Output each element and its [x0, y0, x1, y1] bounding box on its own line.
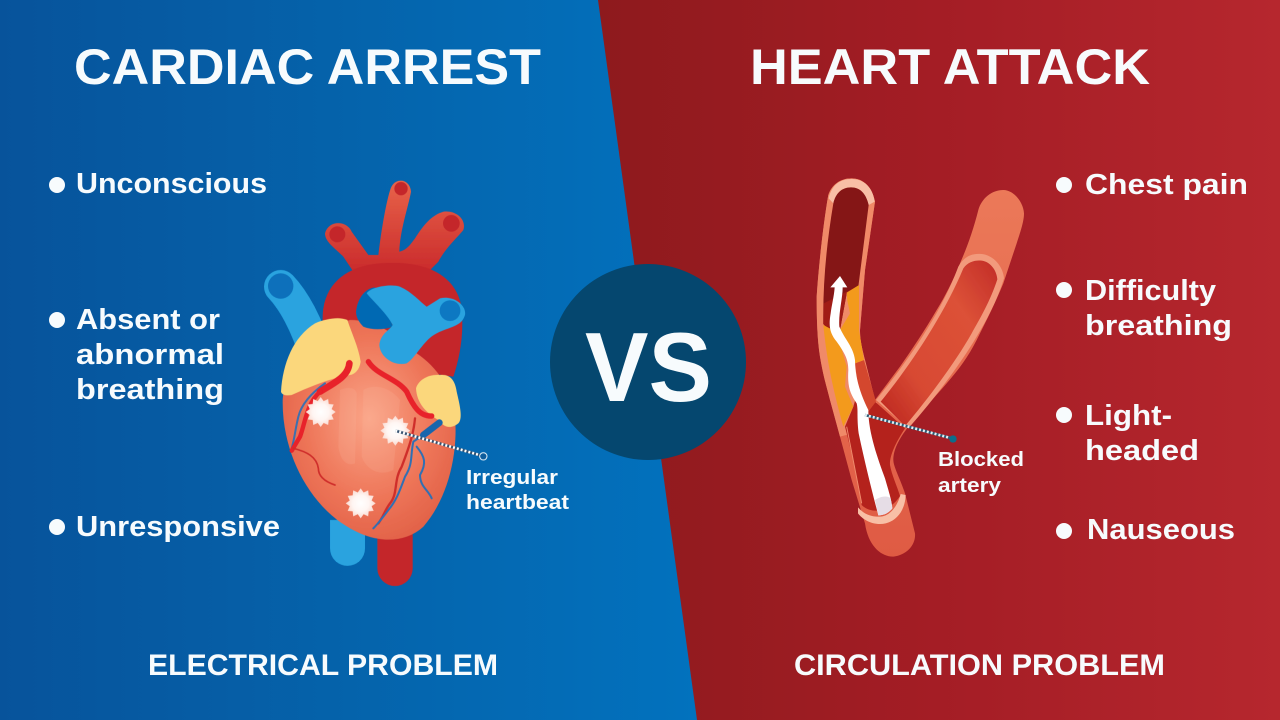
list: heart attack symptoms [1056, 169, 1248, 546]
illustration: artery [817, 178, 1024, 557]
yellow atrium right [416, 375, 461, 427]
bullet: absent or abnormal breathing: breathing [76, 374, 224, 406]
bullet: absent or abnormal breathing: abnormal [76, 339, 224, 371]
left lumen dark [823, 187, 869, 333]
caption: electrical problem: ELECTRICAL PROBLEM [148, 649, 498, 682]
panel: heart attack background [598, 0, 1280, 720]
list: cardiac arrest symptoms [49, 168, 280, 543]
flow shade [875, 497, 892, 515]
plaque right [840, 285, 864, 363]
right lumen rim [876, 254, 1004, 428]
illustration: heart [268, 181, 487, 586]
lower lumen inner wall [847, 427, 862, 503]
aortic arch [323, 263, 462, 377]
vs badge: VS [585, 312, 712, 422]
lower lumen [845, 370, 905, 511]
panel: cardiac arrest background [0, 0, 700, 720]
wedge beside flow [855, 360, 876, 412]
right lumen [881, 261, 997, 426]
label: blocked artery: artery [938, 475, 1002, 497]
label: irregular heartbeat: Irregular [466, 467, 558, 489]
label: blocked artery: Blocked [938, 449, 1024, 471]
caption: circulation problem: CIRCULATION PROBLEM [794, 649, 1165, 682]
plaque [823, 325, 853, 427]
bullet: absent or abnormal breathing [49, 304, 224, 406]
bullet: light-headed: Light- [1085, 400, 1172, 432]
bullet: light-headed [1056, 400, 1199, 467]
bullet: difficulty breathing: Difficulty [1085, 275, 1216, 307]
vs badge [550, 264, 746, 460]
lower vessels [330, 520, 413, 586]
bullet: difficulty breathing: breathing [1085, 310, 1232, 342]
bullet: unconscious: Unconscious [76, 168, 267, 200]
bullet: chest pain: Chest pain [1085, 169, 1248, 201]
label: irregular heartbeat: heartbeat [466, 492, 569, 514]
title: heart attack: HEART ATTACK [750, 39, 1150, 95]
bullet: light-headed: headed [1085, 435, 1199, 467]
title: cardiac arrest: CARDIAC ARREST [74, 39, 541, 95]
arch hole [356, 287, 393, 329]
pulmonary artery [367, 285, 465, 364]
upper arteries [325, 181, 464, 277]
coronary vessels [292, 362, 440, 528]
pointer line [865, 415, 957, 443]
top rim [829, 179, 875, 205]
bullet: difficulty breathing [1056, 275, 1232, 342]
lower rim [858, 494, 906, 524]
artery silhouette [817, 178, 1024, 557]
left tube wall [817, 178, 890, 437]
spark: left [306, 397, 336, 427]
spark: center [380, 416, 410, 446]
label: irregular heartbeat [466, 467, 569, 514]
blue vena cava [268, 273, 317, 357]
yellow atrium left [281, 318, 361, 395]
bullet: absent or abnormal breathing: Absent or [76, 304, 220, 336]
heart lobes [338, 387, 400, 473]
bullet: nauseous: Nauseous [1087, 514, 1235, 546]
spark: bottom [346, 488, 376, 518]
bullet: unresponsive: Unresponsive [76, 511, 280, 543]
heart body [283, 320, 456, 540]
lumen shade [823, 287, 857, 333]
pointer line [395, 431, 487, 460]
label: blocked artery [938, 449, 1024, 497]
blood flow [830, 276, 892, 515]
